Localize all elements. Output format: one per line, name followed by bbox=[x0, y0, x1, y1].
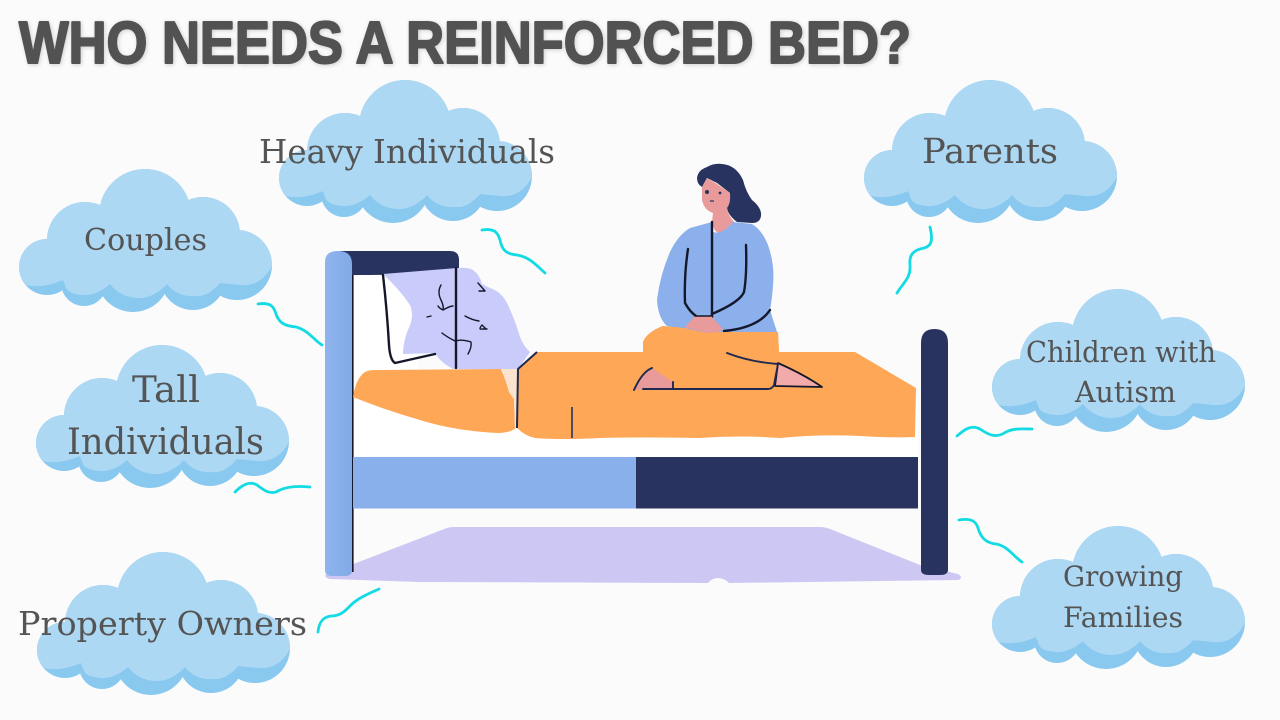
woman bbox=[634, 164, 822, 390]
bed headboard rail bbox=[340, 251, 459, 275]
cloud: Tall Individuals: Individuals bbox=[67, 422, 264, 463]
cloud: Heavy Individuals: Heavy Individuals bbox=[259, 132, 555, 171]
cloud: Heavy Individuals bbox=[259, 80, 555, 223]
face and neck bbox=[702, 178, 734, 233]
bed right post bbox=[921, 329, 948, 575]
right foot bbox=[775, 363, 822, 387]
arrow: Tall Individuals bbox=[235, 483, 310, 493]
cloud: Growing Families bbox=[992, 526, 1245, 669]
cloud: Growing Families: Families bbox=[1063, 601, 1183, 634]
leg outline bbox=[634, 353, 778, 390]
illustration: woman on a reinforced bed bbox=[325, 164, 961, 583]
sweater lines bbox=[685, 222, 770, 331]
arrow: Heavy Individuals bbox=[482, 230, 545, 273]
sweater bbox=[657, 222, 777, 332]
cloud: Couples: Couples bbox=[84, 223, 207, 258]
blanket left bbox=[353, 369, 515, 433]
bed side rail bbox=[353, 457, 918, 508]
cloud: Property Owners bbox=[18, 552, 307, 695]
sheet fold bbox=[502, 369, 519, 429]
cloud: Parents: Parents bbox=[922, 132, 1058, 172]
arrow: Parents bbox=[897, 227, 932, 293]
face details bbox=[705, 190, 721, 201]
left foot bbox=[634, 368, 673, 390]
blanket fold lines bbox=[517, 352, 572, 438]
bed white panel and mattress bbox=[353, 272, 918, 457]
cloud: Couples bbox=[19, 169, 272, 312]
hands bbox=[685, 316, 723, 333]
cloud: Parents bbox=[864, 80, 1117, 223]
arrow: Growing Families bbox=[959, 519, 1022, 562]
cloud: Tall Individuals: Tall bbox=[132, 370, 200, 411]
cloud: Growing Families: Growing bbox=[1063, 560, 1183, 593]
pillow with cracks bbox=[383, 268, 530, 369]
bed left post bbox=[325, 251, 353, 576]
hair bbox=[697, 164, 761, 223]
blanket main bbox=[517, 326, 916, 439]
rug under the bed bbox=[325, 527, 961, 583]
cloud: Children with Autism: Children with bbox=[1026, 335, 1216, 369]
arrow: Children with Autism bbox=[957, 427, 1032, 436]
cloud: Tall Individuals bbox=[36, 345, 289, 488]
cloud: Children with Autism bbox=[992, 289, 1245, 432]
arrow: Couples bbox=[258, 304, 322, 345]
squiggle connectors bbox=[235, 227, 1032, 632]
title: WHO NEEDS A REINFORCED BED? bbox=[19, 10, 911, 76]
cloud: Children with Autism: Autism bbox=[1074, 375, 1176, 409]
cloud: Property Owners: Property Owners bbox=[18, 604, 307, 643]
arrow: Property Owners bbox=[318, 589, 379, 632]
knee of the blanket bbox=[643, 326, 779, 352]
